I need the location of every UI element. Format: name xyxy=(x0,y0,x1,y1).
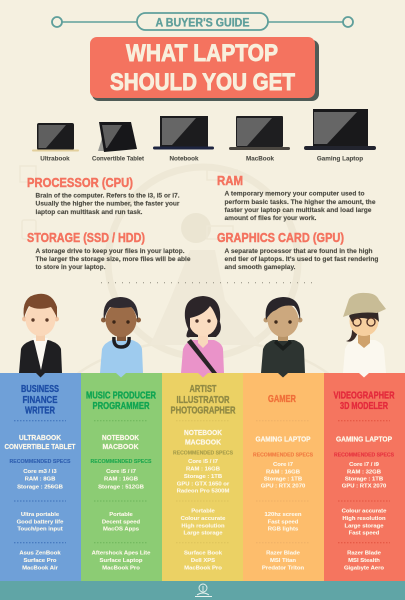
column: videographer 3d modeler: RECOMMENDED SPECS xyxy=(334,452,395,458)
column: business finance writer: Asus ZenBook xyxy=(19,551,61,557)
laptop: macbook: MacBook xyxy=(246,156,274,162)
icon: footer logo xyxy=(195,584,212,596)
column: gamer xyxy=(243,373,324,581)
column: videographer 3d modeler: GAMING LAPTOP xyxy=(336,436,392,443)
column: gamer: Core i7 xyxy=(273,462,294,468)
column: gamer: 120hz screen xyxy=(264,512,302,518)
column: videographer 3d modeler: Core i7 / i9 xyxy=(349,462,380,468)
column: business finance writer: Storage : 256GB xyxy=(17,484,63,490)
column: music producer programmer: Decent speed xyxy=(102,519,141,525)
text block: storage: to store in your laptop. xyxy=(36,264,106,271)
column: artist illustrator photographer: ILLUSTRATOR xyxy=(176,395,230,406)
laptop: convertible tablet xyxy=(92,122,145,162)
column: business finance writer: RAM : 8GB xyxy=(25,477,55,483)
column: business finance writer: MacBook Air xyxy=(22,565,59,571)
text block: ram: faster your laptop can multitask and load large xyxy=(224,207,372,214)
column: music producer programmer: RAM : 16GB xyxy=(104,477,138,483)
text block: processor xyxy=(27,176,180,216)
column: artist illustrator photographer xyxy=(162,373,243,581)
text block: processor: laptop can multitask and run task. xyxy=(36,209,143,216)
column: artist illustrator photographer: Large storage xyxy=(184,531,223,537)
column: business finance writer: ULTRABOOK xyxy=(19,435,61,442)
text block: storage: STORAGE (SSD / HDD) xyxy=(27,231,145,245)
text block: ram xyxy=(217,174,376,222)
laptop: macbook xyxy=(229,116,290,162)
column: videographer 3d modeler: GPU : RTX 2070 xyxy=(342,484,387,490)
text block: processor: Brain of the computer. Refers to the i3, i5 or i7. xyxy=(36,192,180,200)
column: business finance writer: Good battery life xyxy=(17,519,64,525)
column: music producer programmer: RECOMMENDED SPECS xyxy=(90,459,152,465)
laptop: ultrabook xyxy=(32,123,79,162)
laptop: gaming laptop xyxy=(304,109,376,162)
column: music producer programmer: Storage : 512GB xyxy=(98,484,144,490)
watermark emblem xyxy=(20,166,353,490)
text block: ram: amount of files for your work. xyxy=(224,215,317,222)
column: gamer: GAMING LAPTOP xyxy=(256,436,311,443)
column: videographer 3d modeler: Large storage xyxy=(345,523,384,529)
column: artist illustrator photographer: Portable xyxy=(191,509,216,515)
column: music producer programmer: MUSIC PRODUCER xyxy=(86,390,157,402)
text block: graphics card: A separate processor that are found in the high xyxy=(224,248,372,255)
title banner xyxy=(90,37,319,101)
column: business finance writer: RECOMMENDED SPECS xyxy=(10,459,71,465)
laptop: notebook xyxy=(153,116,214,162)
laptop: ultrabook: Ultrabook xyxy=(40,156,70,162)
column: artist illustrator photographer: RECOMMENDED SPECS xyxy=(173,451,234,457)
column: music producer programmer: PROGRAMMER xyxy=(92,401,150,412)
column: artist illustrator photographer: Radeon Pro 5300M xyxy=(177,489,229,495)
column: videographer 3d modeler xyxy=(324,373,405,581)
column: music producer programmer: Surface Laptop xyxy=(100,558,143,564)
column: videographer 3d modeler: Fast speed xyxy=(349,531,380,537)
column: business finance writer: FINANCE xyxy=(22,395,58,406)
column: artist illustrator photographer: Dell XPS xyxy=(191,558,215,564)
text block: graphics card xyxy=(217,231,378,271)
text block: graphics card: end tier of laptops. It's used to get fast rendering xyxy=(224,256,378,263)
character: business person xyxy=(19,294,62,373)
footer bar xyxy=(0,581,405,600)
column: business finance writer: Core m3 / i3 xyxy=(23,469,57,475)
column: music producer programmer xyxy=(81,373,162,581)
title banner: SHOULD YOU GET xyxy=(110,69,295,96)
column: music producer programmer: Portable xyxy=(109,512,134,518)
column: gamer: GAMER xyxy=(268,394,297,405)
text block: processor: Usually the higher the number, the faster your xyxy=(36,201,180,208)
title banner: WHAT LAPTOP xyxy=(126,40,278,67)
eyebrow: a buyer's guide: A BUYER'S GUIDE xyxy=(156,18,250,30)
column: music producer programmer: Core i5 / i7 xyxy=(106,469,137,475)
column: videographer 3d modeler: 3D MODELER xyxy=(340,401,389,412)
character: artist xyxy=(181,296,224,373)
column: business finance writer: WRITER xyxy=(25,406,56,416)
column: music producer programmer: Aftershock Apes Lite xyxy=(92,551,151,557)
text block: ram: RAM xyxy=(217,174,243,188)
column: gamer: Razer Blade xyxy=(266,551,301,557)
text block: graphics card: GRAPHICS CARD (GPU) xyxy=(217,231,344,245)
column: videographer 3d modeler: RAM : 32GB xyxy=(347,469,381,475)
column: gamer: Fast speed xyxy=(268,519,299,525)
column: business finance writer: CONVERTIBLE TABLET xyxy=(4,444,76,451)
column: videographer 3d modeler: High resolution xyxy=(342,516,386,522)
column: artist illustrator photographer: PHOTOGRAPHER xyxy=(170,406,236,416)
column: artist illustrator photographer: ARTIST xyxy=(190,384,216,395)
column: videographer 3d modeler: Storage : 1TB xyxy=(345,477,383,483)
column: artist illustrator photographer: GPU : GTX 1650 or xyxy=(177,481,230,487)
column: music producer programmer: MacBook Pro xyxy=(102,565,140,571)
column: business finance writer: Ultra portable xyxy=(21,512,60,518)
laptop types row xyxy=(32,109,376,162)
character: music producer xyxy=(100,297,143,373)
column: artist illustrator photographer: RAM : 16GB xyxy=(186,467,220,473)
laptop: gaming laptop: Gaming Laptop xyxy=(317,156,363,162)
laptop: notebook: Notebook xyxy=(169,156,199,162)
column: artist illustrator photographer: Storage : 1TB xyxy=(184,474,222,480)
text block: ram: A temporary memory your computer used to xyxy=(224,190,364,198)
column: artist illustrator photographer: MACBOOK xyxy=(185,440,221,446)
column: videographer 3d modeler: Colour accurate xyxy=(342,509,387,515)
column: gamer: RECOMMENDED SPECS xyxy=(253,452,314,458)
column: artist illustrator photographer: Surface Book xyxy=(184,551,223,557)
column: videographer 3d modeler: Razer Blade xyxy=(347,551,382,557)
laptop: convertible tablet: Convertible Tablet xyxy=(92,156,145,162)
column: videographer 3d modeler: MSI Stealth xyxy=(348,558,380,564)
text block: ram: perform basic tasks. The higher the amount, the xyxy=(224,199,376,206)
column: artist illustrator photographer: Core i5 / i7 xyxy=(188,459,219,465)
text block: storage: A storage drive to keep your files in your laptop. xyxy=(36,248,185,255)
character: videographer xyxy=(343,293,386,373)
text block: graphics card: and smooth gameplay. xyxy=(224,264,296,271)
column: gamer: Predator Triton xyxy=(262,565,305,571)
text block: storage xyxy=(27,231,191,271)
column: business finance writer xyxy=(0,373,81,581)
column: music producer programmer: NOTEBOOK xyxy=(102,435,139,442)
column: business finance writer: Surface Pro xyxy=(23,558,57,564)
eyebrow: a buyer's guide xyxy=(52,13,353,30)
column: artist illustrator photographer: Colour accurate xyxy=(181,516,226,522)
column: music producer programmer: MACBOOK xyxy=(102,444,138,451)
character: gamer xyxy=(261,297,305,373)
column: business finance writer: BUSINESS xyxy=(21,384,59,395)
column: artist illustrator photographer: High resolution xyxy=(181,523,225,529)
column: business finance writer: Touch/pen input xyxy=(17,527,63,533)
column: gamer: MSI Titan xyxy=(270,558,296,564)
text block: processor: PROCESSOR (CPU) xyxy=(27,176,133,190)
column: videographer 3d modeler: Gigabyte Aero xyxy=(344,565,384,571)
text block: storage: The larger the storage size, more files will be able xyxy=(36,256,191,263)
column: gamer: RAM : 16GB xyxy=(266,469,300,475)
column: artist illustrator photographer: NOTEBOOK xyxy=(184,430,222,437)
column: music producer programmer: MacOS Apps xyxy=(103,527,140,533)
column: gamer: Storage : 1TB xyxy=(264,477,302,483)
column: gamer: GPU : RTX 2070 xyxy=(261,484,306,490)
column: gamer: RGB lights xyxy=(268,527,299,533)
column: artist illustrator photographer: MacBook Pro xyxy=(184,565,222,571)
